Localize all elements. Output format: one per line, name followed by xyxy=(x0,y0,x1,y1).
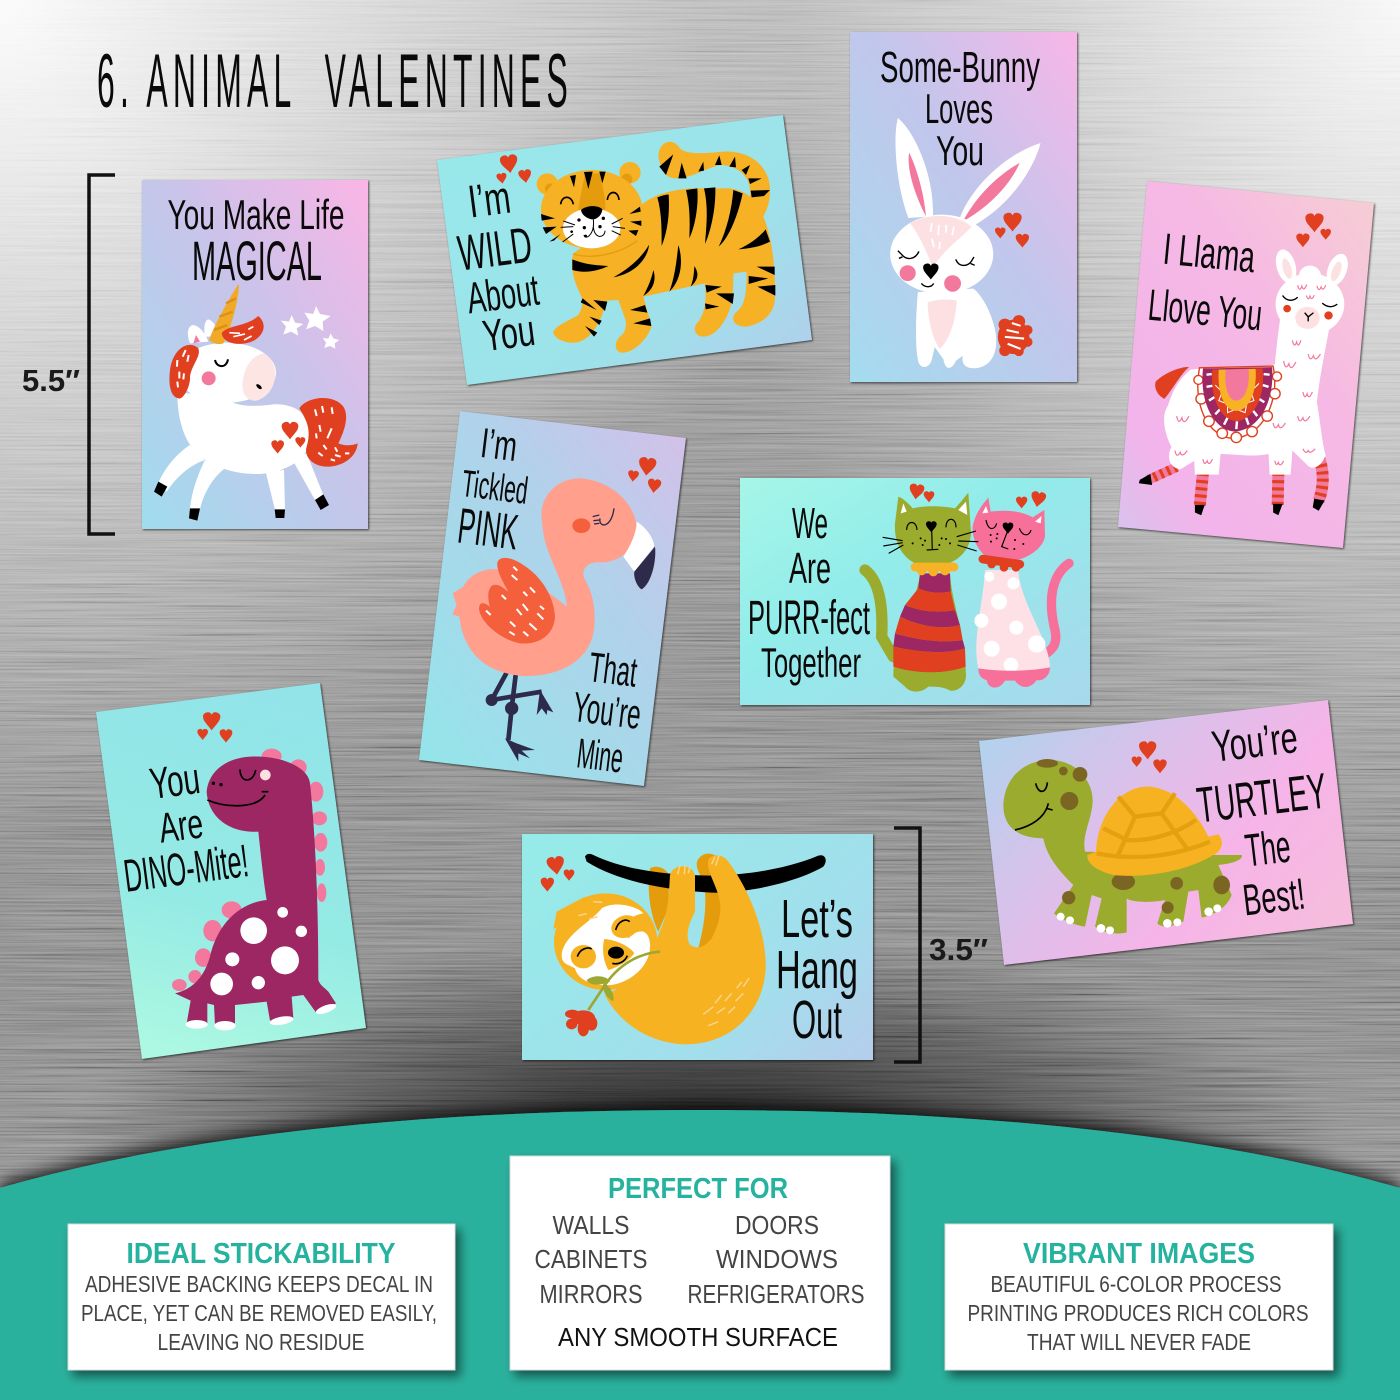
body text: adhesive: ADHESIVE BACKING KEEPS DECAL IN xyxy=(85,1271,433,1297)
body text: vibrant: THAT WILL NEVER FADE xyxy=(1027,1329,1251,1355)
tiger card text: You xyxy=(480,306,538,361)
card: turtle xyxy=(979,700,1353,965)
surface list: WALLS xyxy=(552,1210,630,1240)
sloth card text xyxy=(776,889,858,1050)
sloth illustration xyxy=(541,854,826,1044)
llama saddle blanket xyxy=(1194,366,1282,443)
surface list: MIRRORS xyxy=(540,1279,642,1309)
surface list xyxy=(534,1210,864,1309)
bunny card text: Some-Bunny xyxy=(880,43,1040,92)
body text: vibrant: BEAUTIFUL 6-COLOR PROCESS xyxy=(990,1271,1282,1297)
turtle card text: You’re xyxy=(1209,713,1300,772)
unicorn card text: You Make Life xyxy=(168,191,344,238)
surface list: DOORS xyxy=(735,1210,819,1240)
bunny tail xyxy=(998,315,1033,356)
flamingo card text: You’re xyxy=(570,683,644,738)
flamingo card text: Tickled xyxy=(460,463,530,513)
llama card text: I Llama xyxy=(1161,225,1258,282)
card: llama xyxy=(1118,181,1374,548)
flamingo card text: PINK xyxy=(455,498,521,560)
card: sloth xyxy=(522,834,873,1060)
bunny card text xyxy=(880,43,1040,174)
unicorn card text xyxy=(168,191,344,292)
sloth card text: Out xyxy=(792,990,842,1050)
cats card text: We xyxy=(792,499,828,548)
dinosaur card text xyxy=(121,754,251,902)
card: cats xyxy=(740,478,1090,705)
tiger card text: WILD xyxy=(455,216,535,282)
unicorn card text: MAGICAL xyxy=(192,229,322,292)
panel: ideal stickability xyxy=(68,1224,455,1370)
card: unicorn xyxy=(142,180,368,529)
dinosaur card text: Are xyxy=(156,799,206,852)
turtle illustration xyxy=(1003,741,1242,934)
turtle card text xyxy=(1194,713,1330,925)
turtle card text: The xyxy=(1242,820,1293,876)
dinosaur illustration xyxy=(172,712,337,1030)
llama card text: Llove You xyxy=(1146,281,1264,340)
bunny card text: You xyxy=(936,127,984,174)
flamingo card text: I’m xyxy=(478,419,520,470)
body text: adhesive: LEAVING NO RESIDUE xyxy=(158,1329,364,1355)
cats card text: PURR-fect xyxy=(748,592,870,645)
surface list: CABINETS xyxy=(534,1244,648,1274)
tiger illustration xyxy=(496,142,775,353)
card: bunny xyxy=(850,32,1077,382)
tiger card text xyxy=(455,171,542,361)
cats illustration xyxy=(865,483,1069,692)
cats card text: Are xyxy=(789,544,831,593)
dinosaur card text: DINO-Mite! xyxy=(121,834,251,902)
dimension label: 5.5: 5.5″ xyxy=(22,363,80,398)
bunny card text: Loves xyxy=(925,85,993,132)
surface list: WINDOWS xyxy=(716,1244,838,1274)
dinosaur card text: You xyxy=(147,754,203,809)
bunny illustration xyxy=(890,118,1041,368)
card: tiger xyxy=(437,115,812,385)
body text: adhesive: PLACE, YET CAN BE REMOVED EASILY, xyxy=(81,1300,437,1326)
sloth card text: Hang xyxy=(776,940,858,1000)
card: flamingo xyxy=(419,411,686,786)
cats card text xyxy=(748,499,870,686)
surface list: REFRIGERATORS xyxy=(688,1279,864,1309)
any smooth surface: ANY SMOOTH SURFACE xyxy=(558,1322,838,1352)
bracket: height 5.5 inches xyxy=(89,175,115,534)
flamingo card text: That xyxy=(586,643,640,696)
card: dinosaur xyxy=(96,683,366,1059)
flamingo card text: Mine xyxy=(574,729,626,782)
flamingo illustration xyxy=(452,457,662,762)
flamingo card text xyxy=(455,419,644,782)
dimension label: 3.5: 3.5″ xyxy=(929,932,988,967)
sloth card text: Let’s xyxy=(781,889,853,949)
llama card text xyxy=(1146,225,1264,340)
panel: vibrant images xyxy=(945,1224,1333,1370)
heading: perfect for: PERFECT FOR xyxy=(608,1173,788,1205)
llama illustration xyxy=(1139,213,1352,515)
bracket: width 3.5 inches xyxy=(894,828,920,1062)
panel: perfect for xyxy=(510,1156,890,1370)
cats card text: Together xyxy=(761,639,861,686)
heading: ideal stickability: IDEAL STICKABILITY xyxy=(126,1238,396,1270)
turtle card text: Best! xyxy=(1240,870,1308,925)
tiger card text: I’m xyxy=(465,171,513,228)
teal curved footer band xyxy=(0,1110,1400,1400)
body text: vibrant: PRINTING PRODUCES RICH COLORS xyxy=(968,1300,1308,1326)
body text: vibrant xyxy=(968,1271,1308,1355)
heading: vibrant images: VIBRANT IMAGES xyxy=(1023,1238,1255,1270)
title: 6. ANIMAL VALENTINES xyxy=(97,39,568,124)
body text: adhesive xyxy=(81,1271,437,1355)
unicorn illustration xyxy=(154,284,358,521)
tiger card text: About xyxy=(464,266,542,323)
flower xyxy=(565,1010,597,1036)
